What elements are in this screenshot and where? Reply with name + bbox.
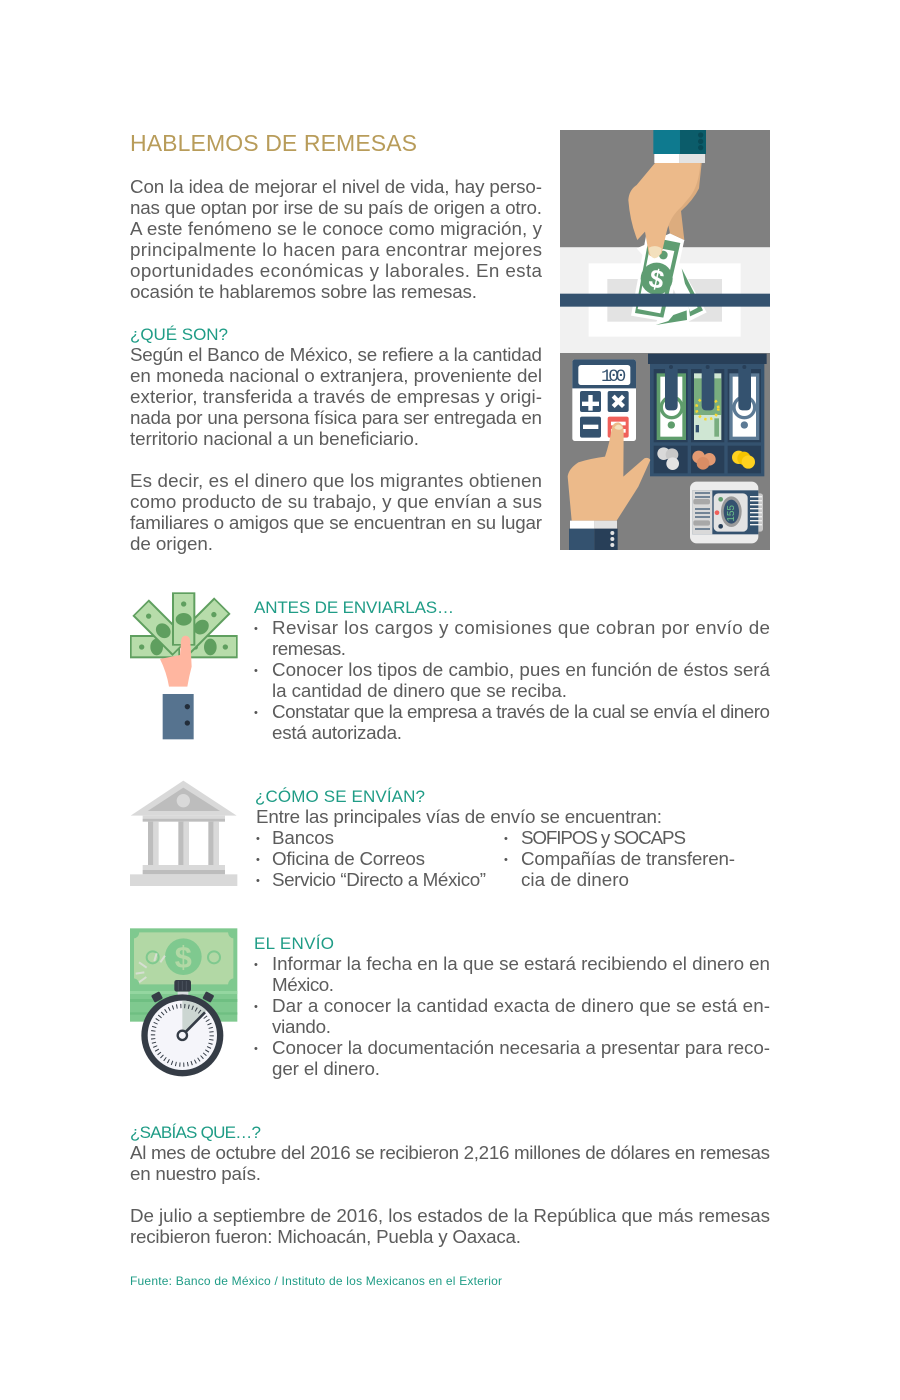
- heading: qué son: ¿QUÉ SON?: [130, 325, 228, 344]
- text block: explanation: [130, 470, 542, 554]
- text block: vías de envío: •: [256, 875, 260, 887]
- text block: vías de envío: Compañías de transferen-: [521, 848, 735, 869]
- text block: definition: en moneda nacional o extranjera, proveniente del: [130, 365, 542, 386]
- text block: definition: exterior, transferida a través de empresas y origi-: [130, 386, 542, 407]
- text block: definition: [130, 344, 542, 449]
- heading: el envío: EL ENVÍO: [254, 934, 334, 953]
- money counter: [690, 482, 763, 543]
- illustration: calculator, cash register and counter: [560, 353, 770, 550]
- list: antes de enviarlas: •: [254, 665, 258, 677]
- text block: definition: Según el Banco de México, se refiere a la cantidad: [130, 344, 542, 365]
- illustration: hand depositing money: [560, 130, 770, 353]
- list: el envío: Conocer la documentación necesaria a presentar para reco-: [272, 1037, 770, 1058]
- list: el envío: •: [254, 1001, 258, 1013]
- list: antes de enviarlas: está autorizada.: [272, 722, 402, 743]
- text block: dato octubre 2016: en nuestro país.: [130, 1163, 261, 1184]
- list: antes de enviarlas: Revisar los cargos y comisiones que cobran por envío de: [272, 617, 770, 638]
- list: el envío: •: [254, 959, 258, 971]
- text block: definition: nada por una persona física para ser entregada en: [130, 407, 542, 428]
- list: antes de enviarlas: Constatar que la empresa a través de la cual se envía el dinero: [272, 701, 770, 722]
- text block: dato estados: recibieron fueron: Michoacán, Puebla y Oaxaca.: [130, 1226, 521, 1247]
- list: el envío: México.: [272, 974, 334, 995]
- list: antes de enviarlas: •: [254, 623, 258, 635]
- icon: bank: [130, 781, 237, 886]
- icon: hand holding banknotes: [130, 592, 238, 739]
- list: antes de enviarlas: •: [254, 707, 258, 719]
- text block: introduction: nas que optan por irse de su país de origen a otro.: [130, 197, 542, 218]
- source note: Fuente: Banco de México / Instituto de los Mexicanos en el Exterior: [130, 1274, 502, 1288]
- calculator: [572, 359, 636, 441]
- text block: explanation: de origen.: [130, 533, 213, 554]
- text block: definition: territorio nacional a un beneficiario.: [130, 428, 419, 449]
- text block: vías de envío: Bancos: [272, 827, 334, 848]
- list: antes de enviarlas: remesas.: [272, 638, 346, 659]
- illustration: hand depositing money: $: [646, 263, 667, 295]
- heading: antes de enviarlas: ANTES DE ENVIARLAS…: [254, 598, 454, 617]
- banknote upper left: [132, 599, 189, 656]
- text block: introduction: oportunidades económicas y laborales. En esta: [130, 260, 543, 281]
- text block: introduction: Con la idea de mejorar el nivel de vida, hay perso-: [130, 176, 542, 197]
- text block: vías de envío: Oficina de Correos: [272, 848, 425, 869]
- banknote top: [172, 592, 195, 646]
- icon: banknote and stopwatch: $: [175, 940, 192, 974]
- text block: explanation: Es decir, es el dinero que los migrantes obtienen: [130, 470, 542, 491]
- text block: vías de envío: Servicio “Directo a México”: [272, 869, 486, 890]
- list: el envío: ger el dinero.: [272, 1058, 380, 1079]
- list: el envío: Informar la fecha en la que se estará recibiendo el dinero en: [272, 953, 770, 974]
- text block: introduction: principalmente lo hacen para encontrar mejores: [130, 239, 542, 260]
- title: HABLEMOS DE REMESAS: [130, 130, 417, 156]
- banknote upper right: [174, 597, 231, 654]
- list: el envío: [254, 953, 770, 1079]
- text block: dato octubre 2016: [130, 1142, 770, 1184]
- list: antes de enviarlas: [254, 617, 771, 743]
- banknote right: [183, 635, 238, 658]
- text block: introduction: A este fenómeno se le conoce como migración, y: [130, 218, 543, 239]
- list: el envío: •: [254, 1043, 258, 1055]
- text block: vías de envío: [256, 806, 735, 890]
- pointing hand: [568, 422, 650, 550]
- text block: vías de envío: •: [504, 854, 508, 866]
- text block: introduction: [130, 176, 543, 302]
- icon: banknote and stopwatch: [130, 928, 237, 1076]
- money counter: 155: [726, 505, 737, 522]
- text block: vías de envío: •: [256, 854, 260, 866]
- text block: dato octubre 2016: Al mes de octubre del 2016 se recibieron 2,216 millones de dólares en remesas: [130, 1142, 770, 1163]
- banknote left: [130, 635, 180, 658]
- list: antes de enviarlas: Conocer los tipos de cambio, pues en función de éstos será: [272, 659, 771, 680]
- text block: vías de envío: SOFIPOS y SOCAPS: [521, 827, 686, 848]
- text block: introduction: ocasión te hablaremos sobre las remesas.: [130, 281, 477, 302]
- list: antes de enviarlas: la cantidad de dinero que se reciba.: [272, 680, 567, 701]
- calculator: 100: [601, 367, 626, 387]
- text block: explanation: como producto de su trabajo, y que envían a sus: [130, 491, 542, 512]
- text block: vías de envío: •: [256, 833, 260, 845]
- text block: vías de envío: Entre las principales vías de envío se encuentran:: [256, 806, 662, 827]
- text block: vías de envío: cia de dinero: [521, 869, 629, 890]
- text block: vías de envío: •: [504, 833, 508, 845]
- text block: explanation: familiares o amigos que se encuentran en su lugar: [130, 512, 542, 533]
- heading: cómo se envían: ¿CÓMO SE ENVÍAN?: [255, 787, 425, 806]
- text block: dato estados: [130, 1205, 770, 1247]
- text block: dato estados: De julio a septiembre de 2016, los estados de la República que más remesas: [130, 1205, 770, 1226]
- heading: sabías que: ¿SABÍAS QUE…?: [130, 1123, 261, 1142]
- cash register drawer: [648, 354, 767, 476]
- list: el envío: Dar a conocer la cantidad exacta de dinero que se está en-: [272, 995, 770, 1016]
- list: el envío: viando.: [272, 1016, 331, 1037]
